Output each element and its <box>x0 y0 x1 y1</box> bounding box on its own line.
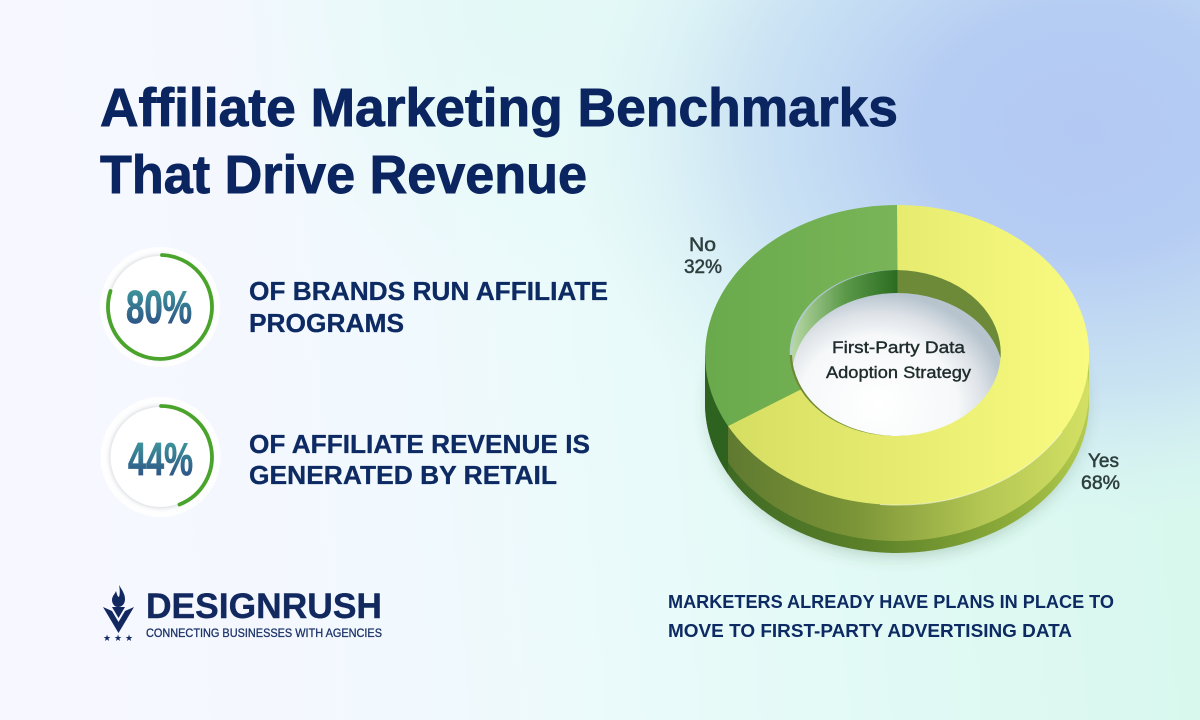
outer side wall <box>705 355 1089 553</box>
title: That Drive Revenue <box>100 145 587 205</box>
icon: three stars: ★ <box>114 633 122 643</box>
center label: Adoption Strategy <box>826 363 972 382</box>
label: no 32%: 32% <box>684 257 722 278</box>
logo: DesignRush <box>103 585 382 643</box>
icon: three stars <box>103 633 133 643</box>
tagline: CONNECTING BUSINESSES WITH AGENCIES <box>146 626 382 640</box>
text: of brands run affiliate programs <box>249 276 608 338</box>
stat: 44 percent of revenue <box>100 397 590 517</box>
stat: 80 percent of brands <box>100 247 608 367</box>
top face: yes segment <box>728 205 1089 505</box>
center label <box>826 338 972 382</box>
icon: flame and shield <box>103 585 134 633</box>
gauge: 80% <box>100 247 220 367</box>
rim highlight <box>880 432 1062 505</box>
text: of affiliate revenue is generated by retail: OF AFFILIATE REVENUE IS <box>249 429 590 459</box>
title <box>100 78 898 205</box>
inner hole <box>792 270 1001 436</box>
top face: no segment <box>705 205 898 426</box>
caption: first-party data plans: MARKETERS ALREADY HAVE PLANS IN PLACE TO <box>668 592 1114 612</box>
text: of affiliate revenue is generated by retail: GENERATED BY RETAIL <box>249 460 557 490</box>
caption: first-party data plans: MOVE TO FIRST-PARTY ADVERTISING DATA <box>668 621 1072 641</box>
icon: three stars: ★ <box>125 633 133 643</box>
ground shadow <box>707 258 1087 558</box>
label: yes 68% <box>1081 451 1120 494</box>
icon: three stars: ★ <box>103 633 111 643</box>
caption: first-party data plans <box>668 592 1114 641</box>
text: of brands run affiliate programs: OF BRANDS RUN AFFILIATE <box>249 276 608 306</box>
gauge: 80%: 80% <box>126 281 192 333</box>
center label: First-Party Data <box>832 338 966 357</box>
label: yes 68%: Yes <box>1088 451 1119 472</box>
text: of affiliate revenue is generated by retail <box>249 429 590 490</box>
title: Affiliate Marketing Benchmarks <box>100 78 898 138</box>
text: of brands run affiliate programs: PROGRAMS <box>249 308 404 338</box>
donut chart: first-party data adoption strategy <box>684 205 1120 558</box>
gauge: 44%: 44% <box>128 433 193 485</box>
gauge: 44% <box>100 397 220 517</box>
label: yes 68%: 68% <box>1081 473 1120 494</box>
label: no 32% <box>684 235 722 278</box>
wordmark: DESIGNRUSH <box>146 587 382 626</box>
label: no 32%: No <box>689 235 716 256</box>
